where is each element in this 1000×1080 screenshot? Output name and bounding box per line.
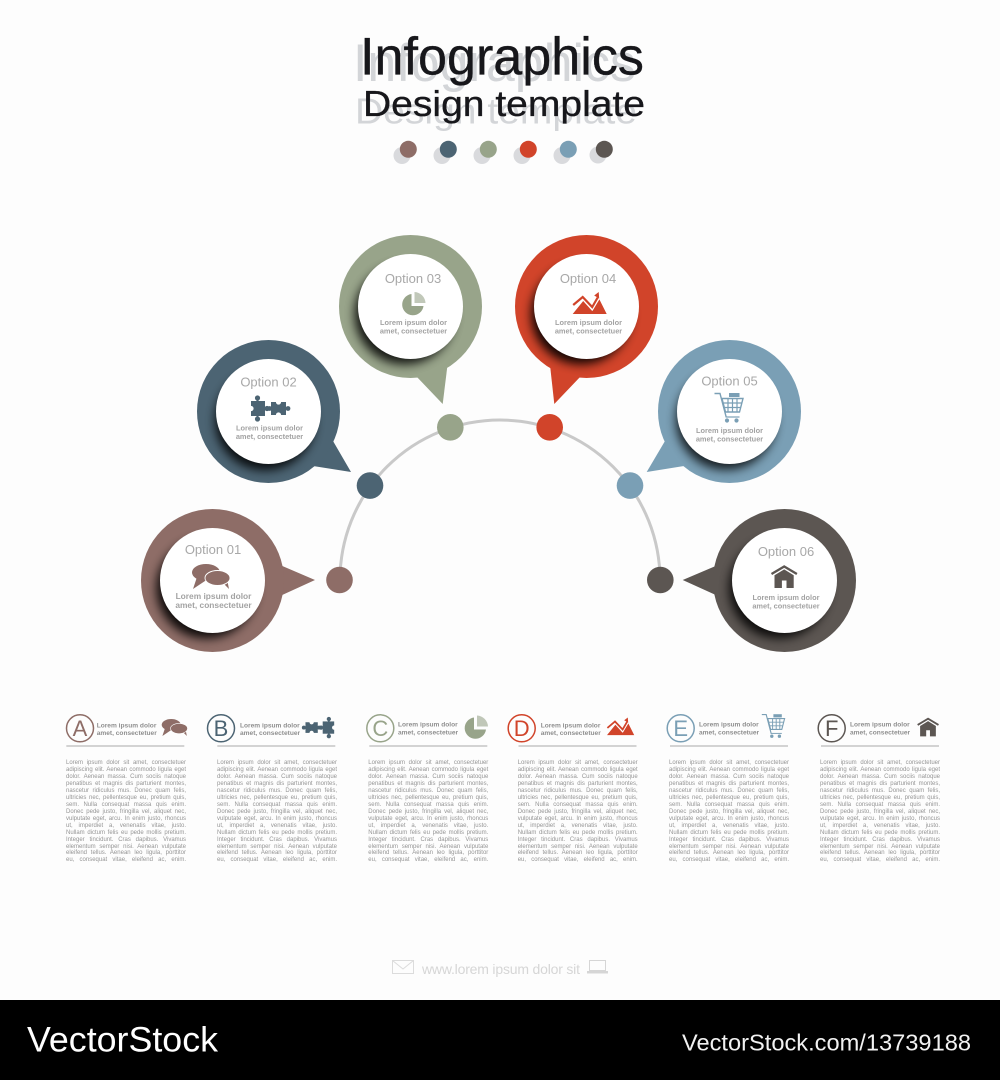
text block C: [368, 760, 488, 863]
text block A: Donec pede justo, fringilla vel, aliquet nec,: [66, 809, 186, 815]
legend header D: [508, 715, 636, 746]
icon: mountain chart: [607, 718, 634, 735]
legend header A: Lorem ipsum dolor: [97, 722, 157, 729]
text block F: penatibus et magnis dis parturient montes,: [820, 781, 940, 787]
text block D: eleifend tellus. Aenean leo ligula, porttitor: [518, 850, 638, 856]
legend header B: B: [214, 716, 228, 741]
icon: house: [772, 566, 797, 588]
panel: option 02: amet, consectetuer: [236, 432, 303, 441]
text block D: Integer tincidunt. Cras dapibus. Vivamus: [518, 837, 638, 843]
text block B: adipiscing elit. Aenean commodo ligula eget: [217, 767, 337, 773]
text block E: vulputate eget, arcu. In enim justo, rhoncus: [669, 816, 789, 822]
text block F: nascetur ridiculus mus. Donec quam felis,: [820, 788, 940, 794]
legend header D: Lorem ipsum dolor: [541, 722, 601, 729]
title: Design template: [363, 83, 645, 124]
text block D: [518, 760, 638, 863]
panel: option 04: amet, consectetuer: [555, 326, 622, 335]
text block B: dolor. Aenean massa. Cum sociis natoque: [217, 774, 337, 780]
legend header A: A: [73, 716, 88, 741]
text block D: adipiscing elit. Aenean commodo ligula eget: [518, 767, 638, 773]
text block A: penatibus et magnis dis parturient montes,: [66, 781, 186, 787]
text block E: ultricies nec, pellentesque eu, pretium quis,: [669, 795, 789, 801]
legend header F: amet, consectetuer: [850, 729, 911, 736]
text block F: ultricies nec, pellentesque eu, pretium quis,: [820, 795, 940, 801]
panel: option 02: [197, 340, 351, 483]
text block F: Donec pede justo, fringilla vel, aliquet nec,: [820, 809, 940, 815]
title: [360, 28, 645, 124]
icon: pie chart: [465, 716, 488, 739]
watermark logo: VectorStock: [27, 1021, 219, 1060]
panel: option 06: Option 06: [758, 544, 814, 559]
text block E: elementum semper nisi. Aenean vulputate: [669, 844, 789, 850]
legend header C: C: [372, 716, 388, 741]
icon: mountain chart: [573, 292, 607, 314]
legend header E: E: [673, 716, 688, 741]
text block C: vulputate eget, arcu. In enim justo, rhoncus: [368, 816, 488, 822]
icon: pie chart: [402, 292, 426, 315]
text block D: Lorem ipsum dolor sit amet, consectetuer: [518, 760, 638, 766]
text block D: penatibus et magnis dis parturient montes,: [518, 781, 638, 787]
text block F: eu, consequat vitae, eleifend ac, enim.: [820, 857, 940, 863]
text block C: ut, imperdiet a, venenatis vitae, justo.: [368, 823, 488, 829]
text block C: Integer tincidunt. Cras dapibus. Vivamus: [368, 837, 488, 843]
text block B: ut, imperdiet a, venenatis vitae, justo.: [217, 823, 337, 829]
timeline dots: [326, 414, 674, 593]
text block C: eleifend tellus. Aenean leo ligula, porttitor: [368, 850, 488, 856]
icon: house: [918, 719, 938, 736]
text block C: Lorem ipsum dolor sit amet, consectetuer: [368, 760, 488, 766]
text block C: dolor. Aenean massa. Cum sociis natoque: [368, 774, 488, 780]
colour swatch dots: [394, 141, 613, 164]
text block F: Nullam dictum felis eu pede mollis pretium.: [820, 830, 940, 836]
text block C: penatibus et magnis dis parturient montes,: [368, 781, 488, 787]
text block F: elementum semper nisi. Aenean vulputate: [820, 844, 940, 850]
text block F: adipiscing elit. Aenean commodo ligula eget: [820, 767, 940, 773]
text block B: eu, consequat vitae, eleifend ac, enim.: [217, 857, 337, 863]
text block D: Nullam dictum felis eu pede mollis pretium.: [518, 830, 638, 836]
text block C: elementum semper nisi. Aenean vulputate: [368, 844, 488, 850]
legend header F: F: [825, 716, 838, 741]
panel: option 02: Lorem ipsum dolor: [236, 424, 303, 432]
text block A: eu, consequat vitae, eleifend ac, enim.: [66, 857, 186, 863]
legend header C: [367, 715, 488, 746]
text block D: eu, consequat vitae, eleifend ac, enim.: [518, 857, 638, 863]
legend header E: amet, consectetuer: [699, 729, 760, 736]
icon: chat bubbles: [162, 719, 188, 736]
panel: option 01: [141, 509, 315, 652]
text block A: nascetur ridiculus mus. Donec quam felis,: [66, 788, 186, 794]
connector arc: [340, 420, 660, 580]
text block D: nascetur ridiculus mus. Donec quam felis,: [518, 788, 638, 794]
text block B: sem. Nulla consequat massa quis enim.: [217, 802, 337, 808]
text block E: Nullam dictum felis eu pede mollis pretium.: [669, 830, 789, 836]
text block E: nascetur ridiculus mus. Donec quam felis,: [669, 788, 789, 794]
legend header F: [818, 715, 939, 746]
panel: option 03: amet, consectetuer: [380, 326, 447, 335]
text block C: sem. Nulla consequat massa quis enim.: [368, 802, 488, 808]
text block A: ultricies nec, pellentesque eu, pretium quis,: [66, 795, 186, 801]
text block C: Nullam dictum felis eu pede mollis pretium.: [368, 830, 488, 836]
icon: shopping cart: [714, 393, 743, 423]
footer url: www.lorem ipsum dolor sit: [421, 961, 580, 977]
text block D: vulputate eget, arcu. In enim justo, rhoncus: [518, 816, 638, 822]
legend header B: Lorem ipsum dolor: [240, 722, 300, 729]
text block E: [669, 760, 789, 863]
footer laptop icon: [587, 960, 608, 974]
text block C: adipiscing elit. Aenean commodo ligula eget: [368, 767, 488, 773]
panel: option 05: Lorem ipsum dolor: [696, 426, 763, 435]
title shadow: [353, 34, 637, 132]
text block C: Donec pede justo, fringilla vel, aliquet nec,: [368, 809, 488, 815]
legend header A: amet, consectetuer: [97, 730, 157, 737]
text block A: Lorem ipsum dolor sit amet, consectetuer: [66, 760, 186, 766]
text block D: Donec pede justo, fringilla vel, aliquet nec,: [518, 809, 638, 815]
legend header E: [667, 714, 788, 746]
text block B: penatibus et magnis dis parturient montes,: [217, 781, 337, 787]
watermark bar: [0, 1000, 1000, 1080]
legend header D: amet, consectetuer: [541, 730, 601, 737]
text block B: Lorem ipsum dolor sit amet, consectetuer: [217, 760, 337, 766]
panel: option 01: Option 01: [185, 542, 241, 557]
text block E: Integer tincidunt. Cras dapibus. Vivamus: [669, 837, 789, 843]
icon: puzzle pieces: [248, 395, 290, 422]
legend header D: D: [514, 716, 530, 741]
text block C: eu, consequat vitae, eleifend ac, enim.: [368, 857, 488, 863]
legend header E: Lorem ipsum dolor: [699, 722, 759, 729]
panel: option 01: amet, consectetuer: [175, 600, 252, 610]
text block F: sem. Nulla consequat massa quis enim.: [820, 802, 940, 808]
legend header B: [208, 715, 336, 746]
icon: puzzle pieces: [302, 717, 336, 738]
legend header C: Lorem ipsum dolor: [398, 722, 458, 729]
text block F: ut, imperdiet a, venenatis vitae, justo.: [820, 823, 940, 829]
text block E: Lorem ipsum dolor sit amet, consectetuer: [669, 760, 789, 766]
panel: option 04: [515, 235, 658, 404]
text block A: Nullam dictum felis eu pede mollis pretium.: [66, 830, 186, 836]
text block E: ut, imperdiet a, venenatis vitae, justo.: [669, 823, 789, 829]
text block F: dolor. Aenean massa. Cum sociis natoque: [820, 774, 940, 780]
text block A: ut, imperdiet a, venenatis vitae, justo.: [66, 823, 186, 829]
text block E: Donec pede justo, fringilla vel, aliquet nec,: [669, 809, 789, 815]
text block E: eu, consequat vitae, eleifend ac, enim.: [669, 857, 789, 863]
text block F: eleifend tellus. Aenean leo ligula, porttitor: [820, 850, 940, 856]
text block F: Integer tincidunt. Cras dapibus. Vivamus: [820, 837, 940, 843]
watermark url: VectorStock.com/13739188: [682, 1030, 971, 1056]
panel: option 05: Option 05: [701, 374, 758, 388]
panel: option 04: Option 04: [560, 271, 616, 286]
text block A: dolor. Aenean massa. Cum sociis natoque: [66, 774, 186, 780]
text block B: Nullam dictum felis eu pede mollis pretium.: [217, 830, 337, 836]
panel: option 01: Lorem ipsum dolor: [176, 591, 252, 601]
text block E: eleifend tellus. Aenean leo ligula, porttitor: [669, 850, 789, 856]
title: Infographics: [360, 28, 644, 86]
text block C: ultricies nec, pellentesque eu, pretium quis,: [368, 795, 488, 801]
text block C: nascetur ridiculus mus. Donec quam felis,: [368, 788, 488, 794]
panel: option 05: amet, consectetuer: [696, 434, 763, 444]
legend header A: [66, 715, 188, 746]
text block D: ut, imperdiet a, venenatis vitae, justo.: [518, 823, 638, 829]
text block A: Integer tincidunt. Cras dapibus. Vivamus: [66, 837, 186, 843]
text block A: vulputate eget, arcu. In enim justo, rhoncus: [66, 816, 186, 822]
legend header F: Lorem ipsum dolor: [850, 722, 910, 729]
text block F: vulputate eget, arcu. In enim justo, rhoncus: [820, 816, 940, 822]
text block B: Donec pede justo, fringilla vel, aliquet nec,: [217, 809, 337, 815]
text block A: [66, 760, 186, 863]
text block D: sem. Nulla consequat massa quis enim.: [518, 802, 638, 808]
text block A: elementum semper nisi. Aenean vulputate: [66, 844, 186, 850]
text block B: eleifend tellus. Aenean leo ligula, porttitor: [217, 850, 337, 856]
text block E: sem. Nulla consequat massa quis enim.: [669, 802, 789, 808]
text block A: sem. Nulla consequat massa quis enim.: [66, 802, 186, 808]
text block F: [820, 760, 940, 863]
text block B: vulputate eget, arcu. In enim justo, rhoncus: [217, 816, 337, 822]
panel: option 06: [683, 509, 856, 652]
panel: option 02: Option 02: [240, 374, 297, 390]
panel: option 05: [647, 340, 801, 483]
legend header C: amet, consectetuer: [398, 729, 459, 736]
icon: shopping cart: [762, 714, 785, 738]
panel: option 03: [339, 235, 482, 404]
icon: chat bubbles: [192, 564, 230, 589]
text block E: adipiscing elit. Aenean commodo ligula eget: [669, 767, 789, 773]
text block D: dolor. Aenean massa. Cum sociis natoque: [518, 774, 638, 780]
text block E: penatibus et magnis dis parturient montes,: [669, 781, 789, 787]
text block E: dolor. Aenean massa. Cum sociis natoque: [669, 774, 789, 780]
panel: option 06: Lorem ipsum dolor: [753, 593, 820, 602]
title shadow: Infographics: [353, 34, 636, 93]
panel: option 03: Option 03: [385, 271, 441, 286]
text block D: ultricies nec, pellentesque eu, pretium quis,: [518, 795, 638, 801]
text block D: elementum semper nisi. Aenean vulputate: [518, 844, 638, 850]
legend header B: amet, consectetuer: [240, 730, 301, 737]
panel: option 04: Lorem ipsum dolor: [555, 318, 622, 327]
text block A: adipiscing elit. Aenean commodo ligula eget: [66, 767, 186, 773]
panel: option 03: Lorem ipsum dolor: [380, 318, 447, 327]
text block B: elementum semper nisi. Aenean vulputate: [217, 844, 337, 850]
text block A: eleifend tellus. Aenean leo ligula, porttitor: [66, 850, 186, 856]
title shadow: Design template: [355, 90, 637, 132]
text block B: nascetur ridiculus mus. Donec quam felis,: [217, 788, 337, 794]
text block B: ultricies nec, pellentesque eu, pretium quis,: [217, 795, 337, 801]
footer envelope icon: [392, 960, 414, 974]
panel: option 06: amet, consectetuer: [752, 601, 820, 610]
text block B: [217, 760, 337, 863]
text block F: Lorem ipsum dolor sit amet, consectetuer: [820, 760, 940, 766]
text block B: Integer tincidunt. Cras dapibus. Vivamus: [217, 837, 337, 843]
